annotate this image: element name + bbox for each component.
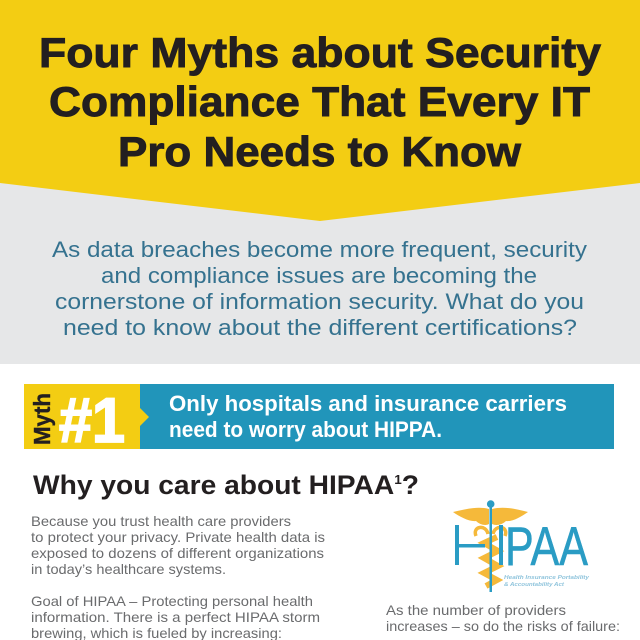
intro text: cornerstone of information security. What do you	[55, 289, 584, 314]
myth banner blue background	[140, 384, 614, 449]
intro text: need to know about the different certifications?	[63, 315, 577, 340]
logo wings	[453, 508, 489, 525]
text block: why care: Because you trust health care providers	[31, 513, 291, 529]
logo caption: Health Insurance Portability	[504, 575, 590, 581]
panel: yellow title banner	[0, 0, 640, 221]
text block: risks	[386, 602, 620, 634]
myth statement: Only hospitals and insurance carriers	[169, 391, 567, 416]
logo lettering H	[455, 525, 503, 565]
text block: why care: information. There is a perfect HIPAA storm	[31, 609, 320, 625]
intro text: As data breaches become more frequent, security	[52, 237, 588, 262]
text block: risks: increases – so do the risks of failure:	[386, 618, 620, 634]
text block: why care: Goal of HIPAA – Protecting personal health	[31, 593, 313, 609]
title: Pro Needs to Know	[118, 128, 521, 175]
heading: why you care: ?	[402, 470, 419, 500]
title	[39, 29, 602, 175]
logo snake coil	[484, 537, 498, 586]
logo lettering PAA: PAA	[505, 515, 588, 577]
text block: why care: to protect your privacy. Private health data is	[31, 529, 325, 545]
myth badge yellow background	[24, 384, 149, 449]
text block: risks: As the number of providers	[386, 602, 566, 618]
intro text: and compliance issues are becoming the	[101, 263, 537, 288]
text block: why care: in today’s healthcare systems.	[31, 561, 226, 577]
logo staff	[490, 505, 492, 592]
panel: myth 1 banner	[24, 384, 614, 456]
myth number: #1	[59, 386, 125, 456]
myth label: Myth	[29, 393, 55, 445]
intro text	[52, 237, 588, 340]
text block: why care: exposed to dozens of different organizations	[31, 545, 324, 561]
myth statement: need to worry about HIPPA.	[169, 417, 442, 442]
logo caption: & Accountability Act	[504, 582, 565, 588]
heading: why you care: 1	[394, 472, 402, 487]
title: Four Myths about Security	[39, 29, 602, 76]
icon: HIPAA logo	[453, 500, 590, 592]
logo caption	[504, 575, 590, 588]
title: Compliance That Every IT	[49, 78, 590, 125]
panel: intro background	[0, 150, 640, 364]
logo snake heads	[475, 527, 506, 536]
text block: why care	[31, 513, 325, 640]
myth statement	[169, 391, 567, 442]
heading: why you care: Why you care about HIPAA	[33, 470, 379, 500]
